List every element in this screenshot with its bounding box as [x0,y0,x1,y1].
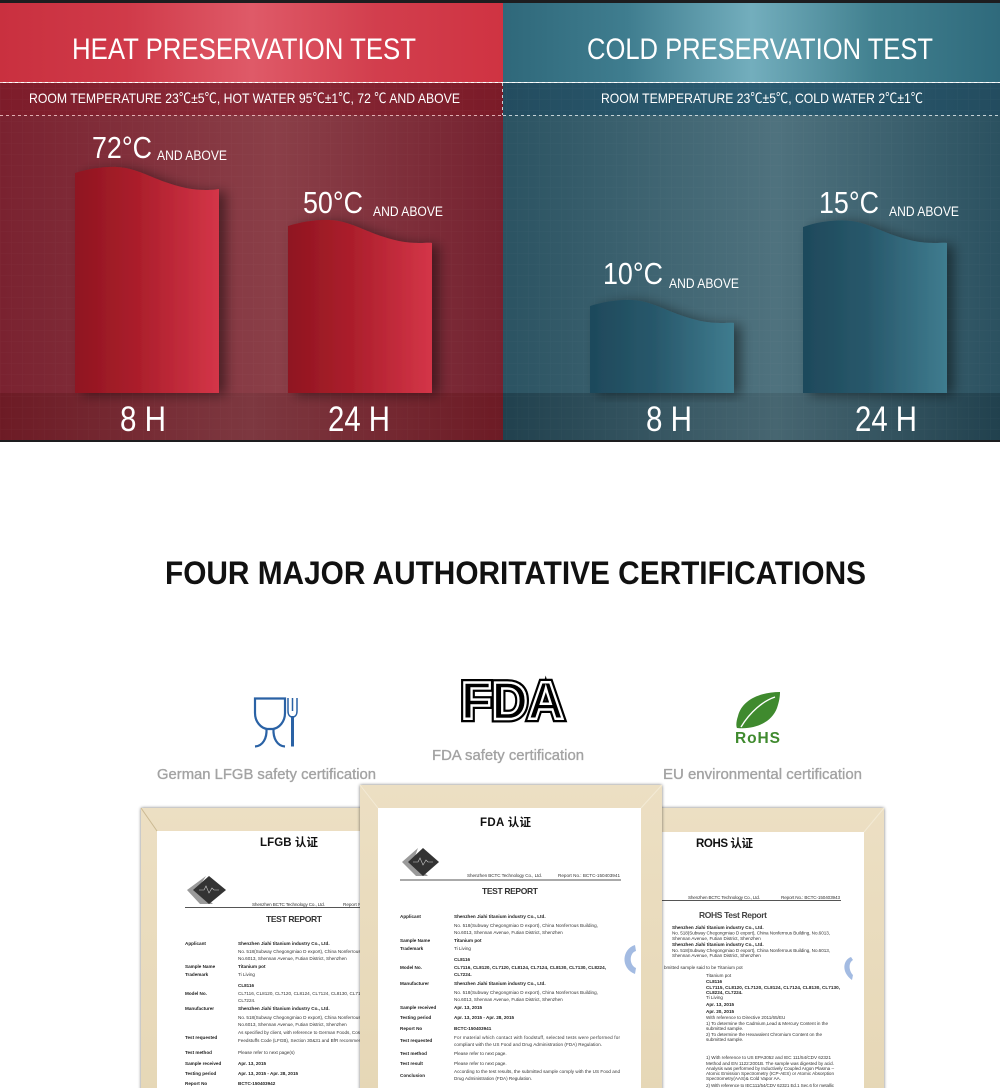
icon: RoHS leaf logo [735,692,780,747]
value: 10°C: AND ABOVE [669,276,739,291]
value: 50°C [303,185,443,220]
report text: ROHS: CL8116 [706,979,723,984]
label: FDA certification: FDA safety certification [432,747,584,764]
report text: ROHS: Spectrometry(AAS)& Cold Vapor AA. [706,1076,781,1081]
report text: ROHS: Shennan Avenue, Futian District, Shenzhen [672,936,761,941]
report text: ROHS: 2) To determine the Hexavalent Chromium Content on the [706,1032,822,1037]
report text: FDA: Shenzhen BCTC Technology Co., Ltd. [467,873,542,878]
value: 72°C: 72°C [92,130,152,165]
report text: FDA: Drug Administration (FDA) Regulation. [454,1076,532,1081]
bar: 24 H heat retention [288,220,432,393]
report text: LFGB [185,902,374,1086]
certificate heading: ROHS: ROHS 认证 [696,836,754,850]
stamp: FDA report [624,945,636,974]
report text: ROHS: Titanium pot [706,973,732,978]
top edge line [0,0,1000,3]
report text: FDA: Apr. 13, 2015 - Apr. 28, 2015 [454,1015,515,1020]
test lab logo: FDA report [402,848,439,876]
report text: LFGB: Sample Name [185,964,216,969]
axis label: 8 H: 8 H [120,400,166,439]
report text: FDA: No.6013, Shennan Avenue, Futian District, Shenzhen [454,997,563,1002]
icon: FDA logo: FDA [461,672,564,731]
report text: LFGB: Model No. [185,991,207,996]
report text: LFGB: BCTC-150403942 [238,1081,276,1086]
report text: LFGB: Report No [185,1081,207,1086]
panel: cold preservation test [502,3,1000,440]
report text: LFGB: TEST REPORT [266,914,323,924]
report text: FDA: Testing period [400,1015,431,1020]
report text: FDA: TEST REPORT [482,886,539,896]
report text: FDA: According to the test results, the submitted sample comply with the US Food and [454,1069,620,1074]
report text: LFGB: Sample received [185,1061,221,1066]
axis label: cold 8 H: 8 H [646,400,692,439]
report text: LFGB: Shenzhen Jiahi titanium industry Co., Ltd. [238,1006,330,1011]
report text: ROHS: Shennan Avenue, Futian District, Shenzhen [672,953,761,958]
report text: LFGB: Feedstuffs Code (LFGB), Section 30&31 and BfR recommendation [238,1038,374,1043]
report text: FDA: Conclusion [400,1073,425,1078]
report text: LFGB: No.6013, Shennan Avenue, Futian District, Shenzhen [238,956,347,961]
panel: heat preservation test [0,3,503,440]
heading: heat test: HEAT PRESERVATION TEST [72,33,416,66]
report text: LFGB: As specified by client, with reference to German Foods, Cosmetics [238,1030,374,1035]
report text: LFGB: Trademark [185,972,209,977]
subtitle: cold conditions: ROOM TEMPERATURE 23℃±5℃, COLD WATER 2℃±1℃ [601,90,923,106]
report text: FDA: Shenzhen Jiahi titanium industry Co., Ltd. [454,981,546,986]
report text: ROHS: 1) To determine the Cadmium,Lead & Mercury Content in the [706,1021,828,1026]
value: 72°C [92,130,227,165]
label: EU certification: EU environmental certification [663,766,862,783]
report text: LFGB: CL8116 [238,983,255,988]
report text: LFGB: No. 518(Subway Chegongmiao D export), China Nonferrous [238,949,361,954]
value: 15°C: AND ABOVE [889,204,959,219]
certificate heading: FDA: FDA 认证 [480,815,532,829]
subtitle: heat conditions: ROOM TEMPERATURE 23℃±5℃, HOT WATER 95℃±1℃, 72 ℃ AND ABOVE [29,90,460,106]
report text: ROHS: submitted sample. [706,1037,743,1042]
axis label: cold 24 H: 24 H [855,400,917,439]
value: 10°C: 10°C [603,256,663,291]
report text: LFGB: Shenzhen Jiahi titanium industry Co., Ltd. [238,941,330,946]
report text: ROHS: submitted sample. [706,1026,743,1031]
report text: ROHS: No. 518(Subway Chegongmiao D export), China Nonferrous Building, No.6013, [672,930,830,936]
report text: LFGB: Please refer to next page(s) [238,1050,295,1055]
report text: LFGB: Report No. [343,902,365,907]
report text: ROHS: Atomic Emission Spectrometry (ICP-AES) or Atomic Absorption [706,1071,834,1076]
certificate: LFGB [141,808,374,1088]
value: 15°C [819,185,959,220]
certificate heading: LFGB: LFGB 认证 [260,835,318,849]
report text: FDA: Test method [400,1051,427,1056]
report text: FDA: Sample received [400,1005,436,1010]
report text: LFGB: Test requested [185,1035,218,1040]
report text: FDA: Shenzhen Jiahi titanium industry Co., Ltd. [454,914,546,919]
report text: ROHS: Shenzhen Jiahi titanium industry Co., Ltd. [672,925,764,930]
report text: LFGB: Test method [185,1050,212,1055]
report text: ROHS [655,895,841,1088]
report text: LFGB: Shenzhen BCTC Technology Co., Ltd. [252,902,325,907]
icon: RoHS leaf logo: RoHS [735,730,780,747]
report text: FDA: Test requested [400,1038,433,1043]
heading: cold test: COLD PRESERVATION TEST [587,33,933,66]
bottom edge line [0,440,1000,442]
icon: LFGB glass and fork [255,698,297,746]
report text: FDA: Please refer to next page. [454,1061,507,1066]
report text: LFGB: Testing period [185,1071,216,1076]
report text: LFGB: CL7224. [238,998,255,1003]
report text: ROHS: 2) With reference to IEC111/54/CDV 62321 Ed.1 Sec.6 for metallic [706,1083,835,1088]
report text: FDA: Manufacturer [400,981,429,986]
report text: FDA: Titanium pot [454,938,482,943]
report text: ROHS: Method and EN 1122:2001B. The sample was digested by acid. [706,1061,834,1066]
report text: FDA: No. 518(Subway Chegongmiao D export), China Nonferrous Building, [454,990,598,995]
value: 72°C: AND ABOVE [157,148,227,163]
axis label: 24 H: 24 H [328,400,390,439]
report text: ROHS: With reference to Directive 2011/65/EU [706,1015,785,1020]
certificate: FDA [360,785,662,1088]
test lab logo [187,876,226,904]
report text: ROHS: Analysis was performed by Inductively Coupled Argon Plasma – [706,1066,834,1071]
report text: LFGB: Titanium pot [238,964,266,969]
report text: ROHS: Shenzhen Jiahi titanium industry Co., Ltd. [672,942,764,947]
report text: LFGB: Apr. 13, 2015 [238,1061,267,1066]
report text: ROHS: Shenzhen BCTC Technology Co., Ltd. [688,895,760,900]
report text: ROHS: No. 518(Subway Chegongmiao D export), China Nonferrous Building, No.6013, [672,948,830,953]
report text: ROHS: bmitted sample said to be Titanium pot [664,965,743,970]
report text: FDA: CL7224. [454,972,472,977]
report text: FDA: Ti Living [454,946,471,951]
bar: 24 H cold retention [803,220,947,393]
value: 10°C [603,256,739,291]
report text: ROHS: CL8224, CL7224. [706,990,743,995]
report text: FDA: Report No [400,1026,422,1031]
stamp [844,957,853,980]
report text: FDA: For material which contact with foodstuff, selected tests were performed for [454,1035,620,1040]
report text: LFGB: No.6013, Shennan Avenue, Futian District, Shenzhen [238,1022,347,1027]
report text: ROHS: ROHS Test Report [699,910,767,920]
report text: LFGB: Manufacturer [185,1006,214,1011]
report text: FDA: Report No.: BCTC-150403941 [558,873,620,878]
report text: ROHS: CL7115, CL8120, CL7120, CL8124, CL7124, CL8130, CL7130, [706,985,840,990]
report text: FDA: Sample Name [400,938,431,943]
certificate: ROHS [650,808,884,1088]
report text: FDA [400,873,621,1081]
report text: LFGB: Applicant [185,941,206,946]
report text: FDA: Applicant [400,914,421,919]
title: certifications: FOUR MAJOR AUTHORITATIVE CERTIFICATIONS [165,555,866,591]
report text: FDA: CL8116 [454,957,471,962]
value: 50°C: 50°C [303,185,363,220]
report text: ROHS: 1) With reference to US EPA3052 and IEC 111/54/CDV 62321 [706,1055,831,1060]
report text: ROHS: Apr. 20, 2015 [706,1009,735,1014]
report text: LFGB: Ti Living [238,972,255,977]
report text: ROHS: Report No.: BCTC-150403943 [781,895,840,900]
report text: FDA: Test result [400,1061,423,1066]
icon: FDA logo: FDA [461,672,564,731]
report text: FDA: Apr. 13, 2015 [454,1005,483,1010]
bar: 8 H cold retention [590,300,734,393]
label: LFGB certification: German LFGB safety certification [157,766,376,783]
report text: FDA: No. 518(Subway Chegongmiao D export), China Nonferrous Building, [454,923,598,928]
value: 50°C: AND ABOVE [373,204,443,219]
report text: FDA: BCTC-150403941 [454,1026,492,1031]
report text: LFGB: Apr. 13, 2015 - Apr. 28, 2015 [238,1071,299,1076]
report text: FDA: Please refer to next page. [454,1051,507,1056]
report text: FDA: compliant with the US Food and Drug Administration (FDA) Regulation. [454,1042,602,1047]
report text: FDA: No.6013, Shennan Avenue, Futian District, Shenzhen [454,930,563,935]
bar: 8 H heat retention [75,167,219,393]
report text: ROHS: Ti Living [706,995,723,1000]
report text: LFGB: CL7116, CL8120, CL7120, CL8124, CL7124, CL8130, CL7130 [238,991,366,996]
report text: LFGB: No. 518(Subway Chegongmiao D export), China Nonferrous [238,1015,361,1020]
report text: FDA: Model No. [400,965,422,970]
report text: FDA: Trademark [400,946,424,951]
value: 15°C: 15°C [819,185,879,220]
report text: FDA: CL7116, CL8120, CL7120, CL8124, CL7124, CL8130, CL7130, CL8224, [454,965,606,970]
report text: ROHS: Apr. 13, 2015 [706,1002,735,1007]
